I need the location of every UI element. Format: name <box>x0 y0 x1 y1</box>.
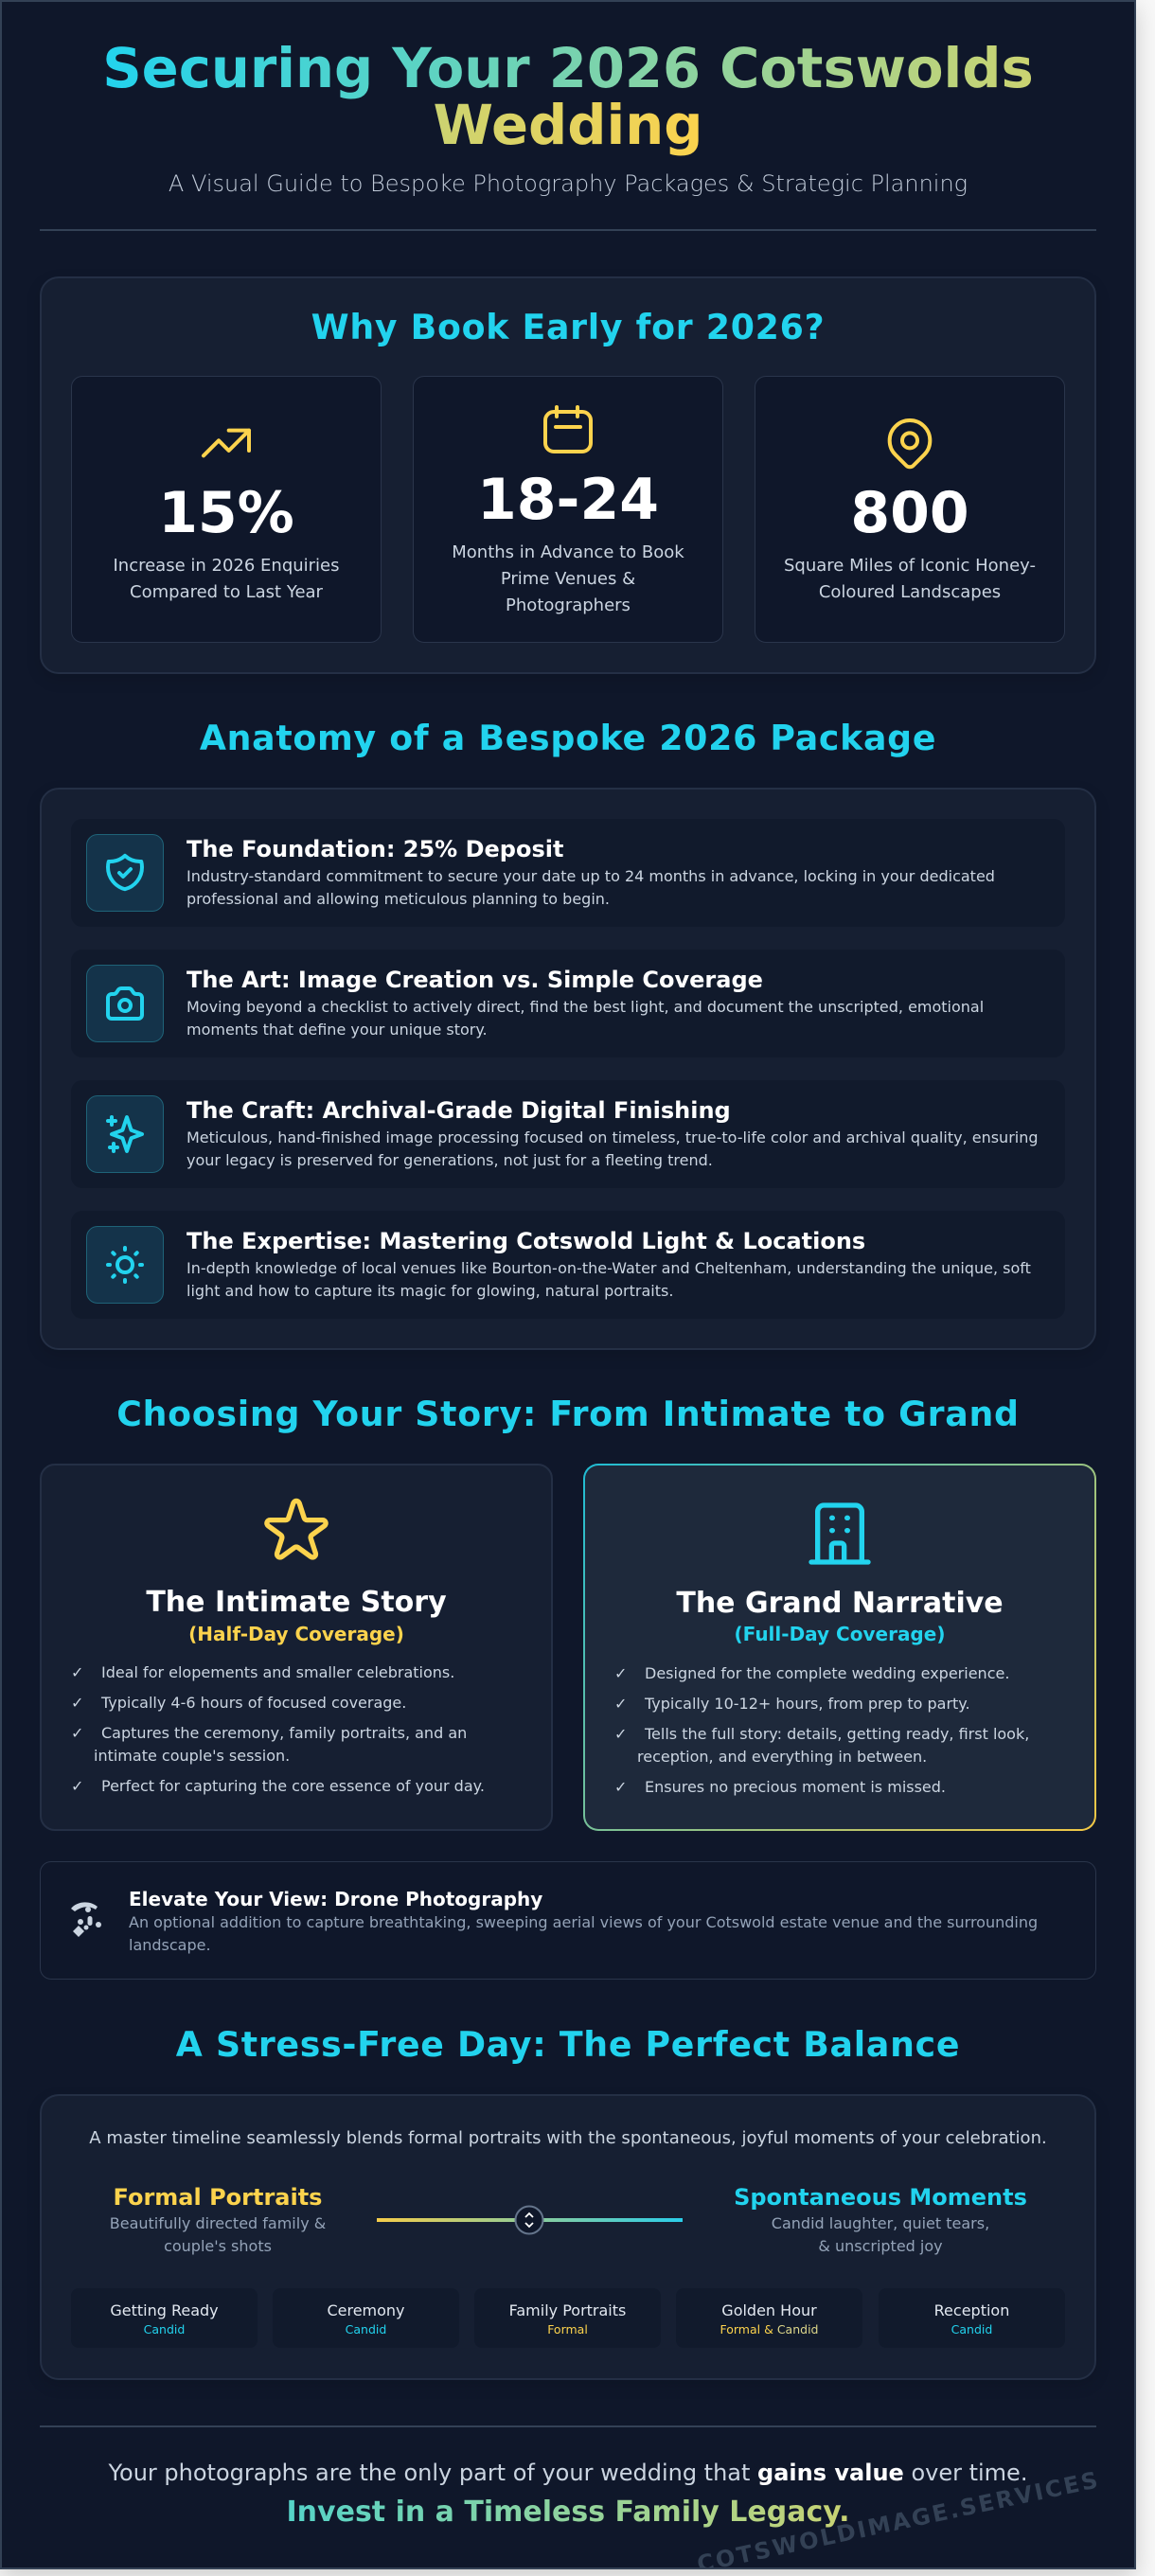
row description: light and how to capture its magic for glowing, natural portraits. <box>187 1282 673 1300</box>
row description: Industry-standard commitment to secure your date up to 24 months in advance, locking in your dedicated <box>187 867 995 885</box>
checklist: Designed for the complete wedding experience. <box>645 1664 1009 1682</box>
checklist: Captures the ceremony, family portraits, and an <box>101 1724 467 1742</box>
checklist: reception, and everything in between. <box>637 1748 927 1766</box>
icon: building <box>808 1502 871 1565</box>
stat number: 18-24 <box>477 467 659 533</box>
row: expertise <box>71 1211 1065 1319</box>
footer call to action <box>40 2494 1096 2532</box>
checklist: ✓ <box>71 1724 83 1742</box>
stat card: 18-24 <box>413 376 723 643</box>
row title: The Expertise: Mastering Cotswold Light & Locations <box>187 1228 865 1254</box>
slider knob <box>515 2206 543 2234</box>
formal title: Formal Portraits <box>114 2184 322 2211</box>
stat card: 15% <box>71 376 382 643</box>
header <box>102 37 1034 197</box>
checklist: Typically 10-12+ hours, from prep to party. <box>645 1695 970 1713</box>
title: Securing Your 2026 Cotswolds Wedding <box>102 37 1034 157</box>
icon: star <box>264 1498 329 1560</box>
row description <box>187 998 984 1039</box>
panel: package anatomy <box>40 788 1096 1350</box>
footer message: Your photographs are the only part of your wedding that gains value over time. <box>109 2460 1027 2486</box>
row: art <box>71 950 1065 1057</box>
heading: choosing your story: Choosing Your Story: From Intimate to Grand <box>116 1394 1020 1434</box>
story subtitle: (Full-Day Coverage) <box>735 1623 945 1645</box>
icon: shield check <box>86 834 164 912</box>
timeline: getting ready: Candid <box>144 2322 185 2336</box>
subtitle: A Visual Guide to Bespoke Photography Packages & Strategic Planning <box>169 170 968 197</box>
formal portraits column <box>110 2184 326 2255</box>
timeline: ceremony: Candid <box>346 2322 386 2336</box>
intro text: A master timeline seamlessly blends formal portraits with the spontaneous, joyful moments of your celebration. <box>89 2128 1047 2148</box>
spontaneous description <box>772 2214 989 2255</box>
row description: your legacy is preserved for generations, not just for a fleeting trend. <box>187 1151 713 1169</box>
timeline: family portraits: Formal <box>547 2322 588 2336</box>
stat label: Prime Venues & <box>501 569 635 589</box>
stat label: Months in Advance to Book <box>452 542 684 562</box>
checklist: ✓ <box>614 1725 627 1743</box>
checklist: ✓ <box>614 1778 627 1796</box>
row title: The Art: Image Creation vs. Simple Coverage <box>187 967 763 993</box>
stat label: Square Miles of Iconic Honey- <box>784 556 1036 576</box>
panel: drone photography <box>40 1861 1096 1980</box>
drone description <box>129 1913 1038 1954</box>
timeline: ceremony: Ceremony <box>327 2301 405 2319</box>
checklist <box>71 1663 485 1795</box>
stat number: 800 <box>850 480 969 546</box>
stat label: Photographers <box>506 595 631 615</box>
icon: drone <box>71 1902 101 1937</box>
footer call to action: Invest in a Timeless Family Legacy. <box>287 2496 849 2529</box>
timeline: ceremony <box>273 2288 459 2348</box>
timeline: getting ready: Getting Ready <box>110 2301 219 2319</box>
heading: anatomy: Anatomy of a Bespoke 2026 Package <box>200 718 936 758</box>
slider bar <box>377 2218 683 2222</box>
timeline: reception <box>879 2288 1065 2348</box>
icon: sparkles <box>86 1095 164 1173</box>
checklist: intimate couple's session. <box>94 1747 290 1765</box>
stat number: 15% <box>158 480 294 546</box>
timeline: golden hour <box>676 2288 862 2348</box>
timeline: golden hour: Formal & Candid <box>720 2322 818 2336</box>
drone description: landscape. <box>129 1936 211 1954</box>
row: craft <box>71 1080 1065 1188</box>
stat label: Compared to Last Year <box>130 582 323 602</box>
row description <box>187 1128 1039 1169</box>
row: foundation <box>71 819 1065 927</box>
icon: map pin <box>888 418 932 470</box>
checklist: Ensures no precious moment is missed. <box>645 1778 946 1796</box>
spontaneous title: Spontaneous Moments <box>734 2184 1027 2211</box>
row description: moments that define your unique story. <box>187 1021 488 1039</box>
timeline: golden hour: Golden Hour <box>721 2301 817 2319</box>
slider <box>377 2206 683 2234</box>
story subtitle: (Half-Day Coverage) <box>188 1623 404 1645</box>
stat label: Increase in 2026 Enquiries <box>113 556 340 576</box>
checklist: ✓ <box>71 1694 83 1712</box>
icon: trending up <box>201 428 252 458</box>
row title: The Craft: Archival-Grade Digital Finishing <box>187 1097 731 1124</box>
checklist: ✓ <box>614 1695 627 1713</box>
heading: stress-free day: A Stress-Free Day: The Perfect Balance <box>176 2024 960 2065</box>
timeline: getting ready <box>71 2288 258 2348</box>
story title: The Intimate Story <box>146 1586 447 1619</box>
stat label <box>784 556 1036 602</box>
heading: why book early: Why Book Early for 2026? <box>311 307 825 347</box>
row description: In-depth knowledge of local venues like Bourton-on-the-Water and Cheltenham, understanding the unique, soft <box>187 1259 1031 1277</box>
icon: sun <box>86 1226 164 1304</box>
panel: grand narrative <box>583 1464 1096 1831</box>
formal description: couple's shots <box>164 2237 272 2255</box>
checklist: Perfect for capturing the core essence of your day. <box>101 1777 485 1795</box>
checklist: Tells the full story: details, getting ready, first look, <box>645 1725 1029 1743</box>
panel: intimate story <box>40 1464 553 1831</box>
timeline: reception: Candid <box>951 2322 992 2336</box>
checklist: Typically 4-6 hours of focused coverage. <box>101 1694 406 1712</box>
panel: why book early <box>40 276 1096 674</box>
row description <box>187 867 995 908</box>
row description: professional and allowing meticulous planning to begin. <box>187 890 610 908</box>
row description <box>187 1259 1031 1300</box>
story title: The Grand Narrative <box>676 1587 1004 1620</box>
row description: Moving beyond a checklist to actively direct, find the best light, and document the unscripted, emotional <box>187 998 984 1016</box>
drone description: An optional addition to capture breathtaking, sweeping aerial views of your Cotswold estate venue and the surrounding <box>129 1913 1038 1931</box>
spontaneous description: & unscripted joy <box>818 2237 943 2255</box>
formal description <box>110 2214 326 2255</box>
spontaneous description: Candid laughter, quiet tears, <box>772 2214 989 2232</box>
timeline: family portraits <box>474 2288 661 2348</box>
row description: Meticulous, hand-finished image processing focused on timeless, true-to-life color and archival quality, ensuring <box>187 1128 1039 1146</box>
row title: The Foundation: 25% Deposit <box>187 836 563 862</box>
formal description: Beautifully directed family & <box>110 2214 326 2232</box>
timeline: family portraits: Family Portraits <box>509 2301 626 2319</box>
stat label: Coloured Landscapes <box>819 582 1001 602</box>
stat label <box>452 542 684 615</box>
checklist: ✓ <box>614 1664 627 1682</box>
panel: balance timeline <box>40 2094 1096 2380</box>
icon: camera <box>86 965 164 1042</box>
checklist: ✓ <box>71 1663 83 1681</box>
spontaneous moments column <box>734 2184 1027 2255</box>
checklist: Ideal for elopements and smaller celebrations. <box>101 1663 454 1681</box>
checklist: ✓ <box>71 1777 83 1795</box>
stat card: 800 <box>755 376 1065 643</box>
checklist <box>614 1664 1029 1796</box>
stat label <box>113 556 340 602</box>
drone title: Elevate Your View: Drone Photography <box>129 1888 542 1910</box>
timeline: reception: Reception <box>934 2301 1009 2319</box>
icon: calendar <box>543 405 593 453</box>
